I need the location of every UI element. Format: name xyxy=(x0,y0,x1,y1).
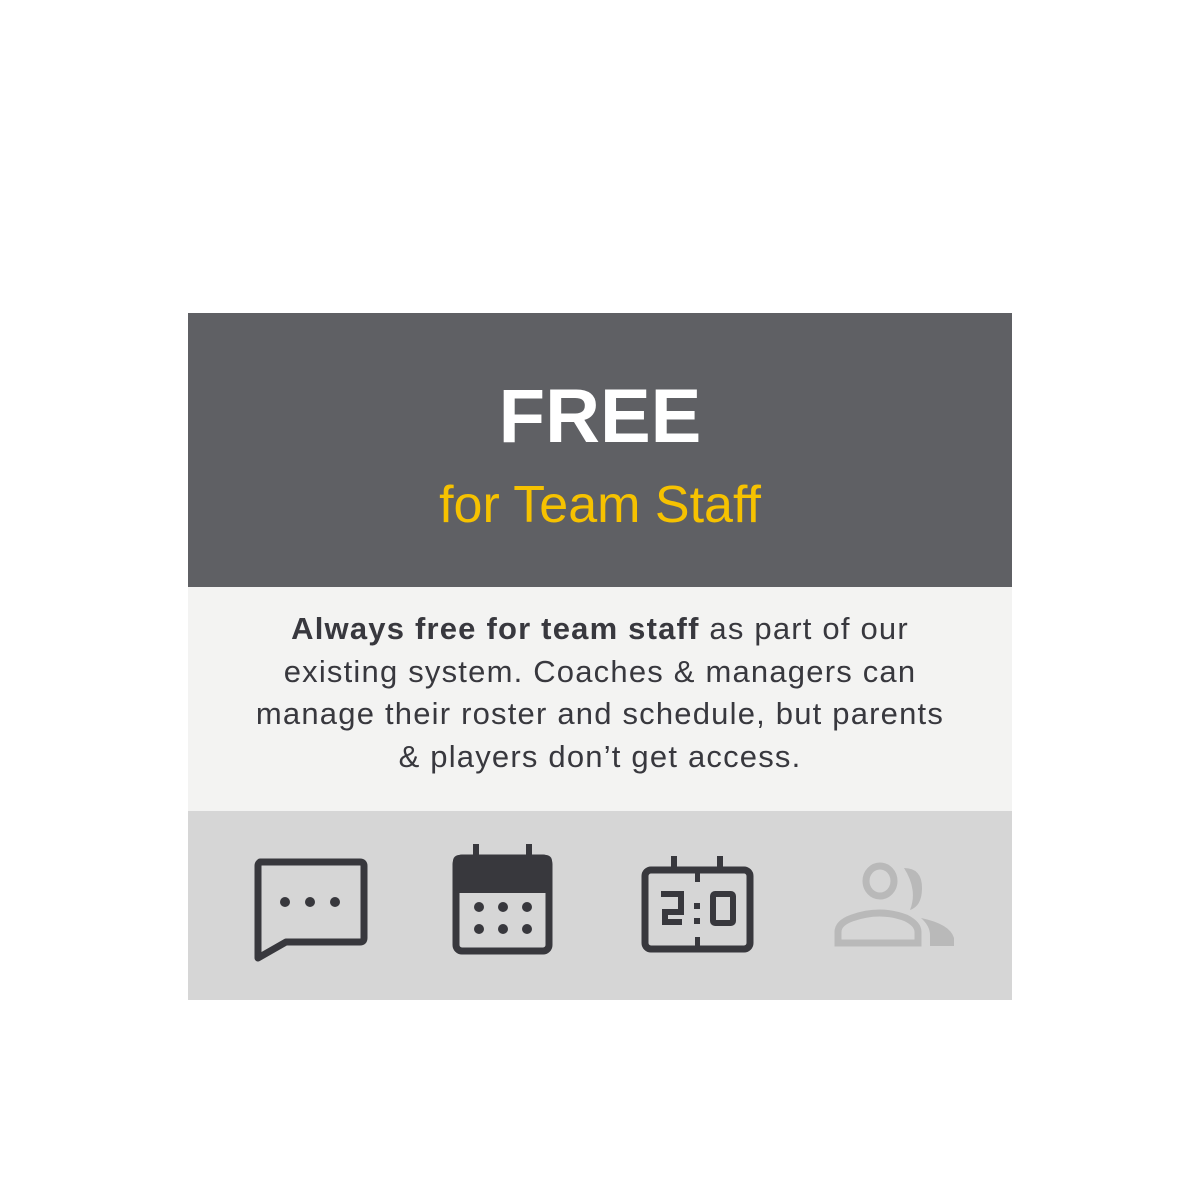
panel: icons xyxy=(188,811,1012,1000)
text block: Always free for team staff as part of our xyxy=(291,611,909,646)
title: FREE xyxy=(499,374,701,459)
icon: chat xyxy=(258,862,364,958)
panel: header xyxy=(188,313,1012,587)
text block: manage their roster and schedule, but parents xyxy=(256,696,944,731)
text block: existing system. Coaches & managers can xyxy=(284,654,916,689)
subtitle: for Team Staff xyxy=(439,476,761,534)
icon: scoreboard xyxy=(645,856,750,949)
icon: people (disabled) xyxy=(838,866,954,946)
icon: calendar xyxy=(453,844,552,951)
text block: & players don’t get access. xyxy=(399,739,801,774)
panel: description xyxy=(188,587,1012,811)
text block xyxy=(256,611,944,774)
